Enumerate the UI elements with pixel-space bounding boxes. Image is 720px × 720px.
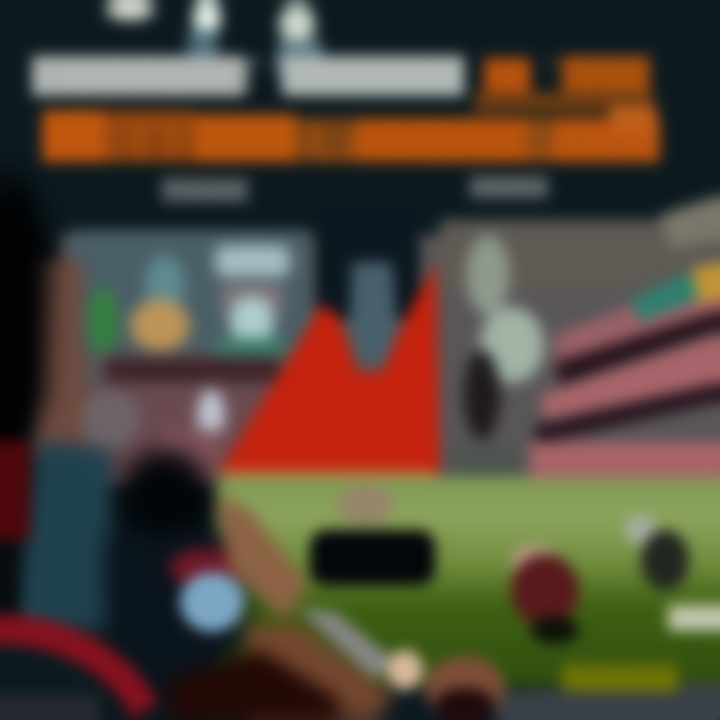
pitch: green grass: [215, 476, 720, 686]
person: red shoulder: [0, 440, 30, 540]
pitch marking: white line: [668, 605, 720, 631]
person: forearm: [215, 495, 308, 620]
person: shirt teal: [15, 440, 112, 630]
caption: yellow-green tag: Betting: [564, 666, 676, 691]
subheadings: two grey labels: Trends: [162, 181, 248, 203]
person: shadow on hand: [435, 688, 495, 720]
screens: colourful billboards on the left: [35, 245, 290, 480]
subheadings: two grey labels: [162, 176, 548, 203]
person: maroon strap: [169, 548, 241, 588]
caption: yellow-green tag: [562, 664, 678, 692]
person: knuckles: [425, 656, 505, 720]
pitch: lower-right grey track: [480, 682, 720, 720]
person: hand: [387, 650, 423, 690]
icon: dark football: [624, 514, 689, 590]
figure in front of chart: [350, 262, 396, 360]
person: red chair arc: [0, 630, 145, 710]
stadium lights: [106, 0, 322, 80]
icon: light blue watch: [180, 572, 244, 632]
icon: red football: [511, 544, 579, 644]
person: black sleeve: [119, 450, 211, 550]
person: dark brown arm: [170, 650, 340, 718]
title: two-line blurred heading: BETTING LANDSCAPE: [42, 112, 660, 172]
title: two-line blurred heading: IN THE: [484, 50, 650, 102]
title: two-line blurred heading: CURRENT TRENDS: [33, 50, 463, 102]
person: grey sleeve: [298, 608, 395, 680]
subheadings: two grey labels: Market: [470, 179, 548, 201]
person: left dark: [0, 540, 20, 630]
dark centre pillar behind chart: [315, 200, 420, 320]
title: two-line blurred heading: [32, 50, 660, 172]
object: black box on pitch: [310, 485, 435, 585]
red chart: mountain-shaped area: [218, 262, 440, 474]
person: brown shadow arm: [245, 625, 395, 718]
person: chair base: [0, 695, 100, 720]
person: dark hair: [0, 170, 50, 445]
person: dark torso: [105, 530, 250, 715]
foreground: seated person: [0, 170, 505, 720]
stands: striped seating on the right: [530, 195, 720, 478]
figure: silhouette right of chart: [450, 235, 544, 475]
stadium stands backdrop: [60, 220, 720, 485]
chart base: orange glow: [222, 470, 434, 477]
